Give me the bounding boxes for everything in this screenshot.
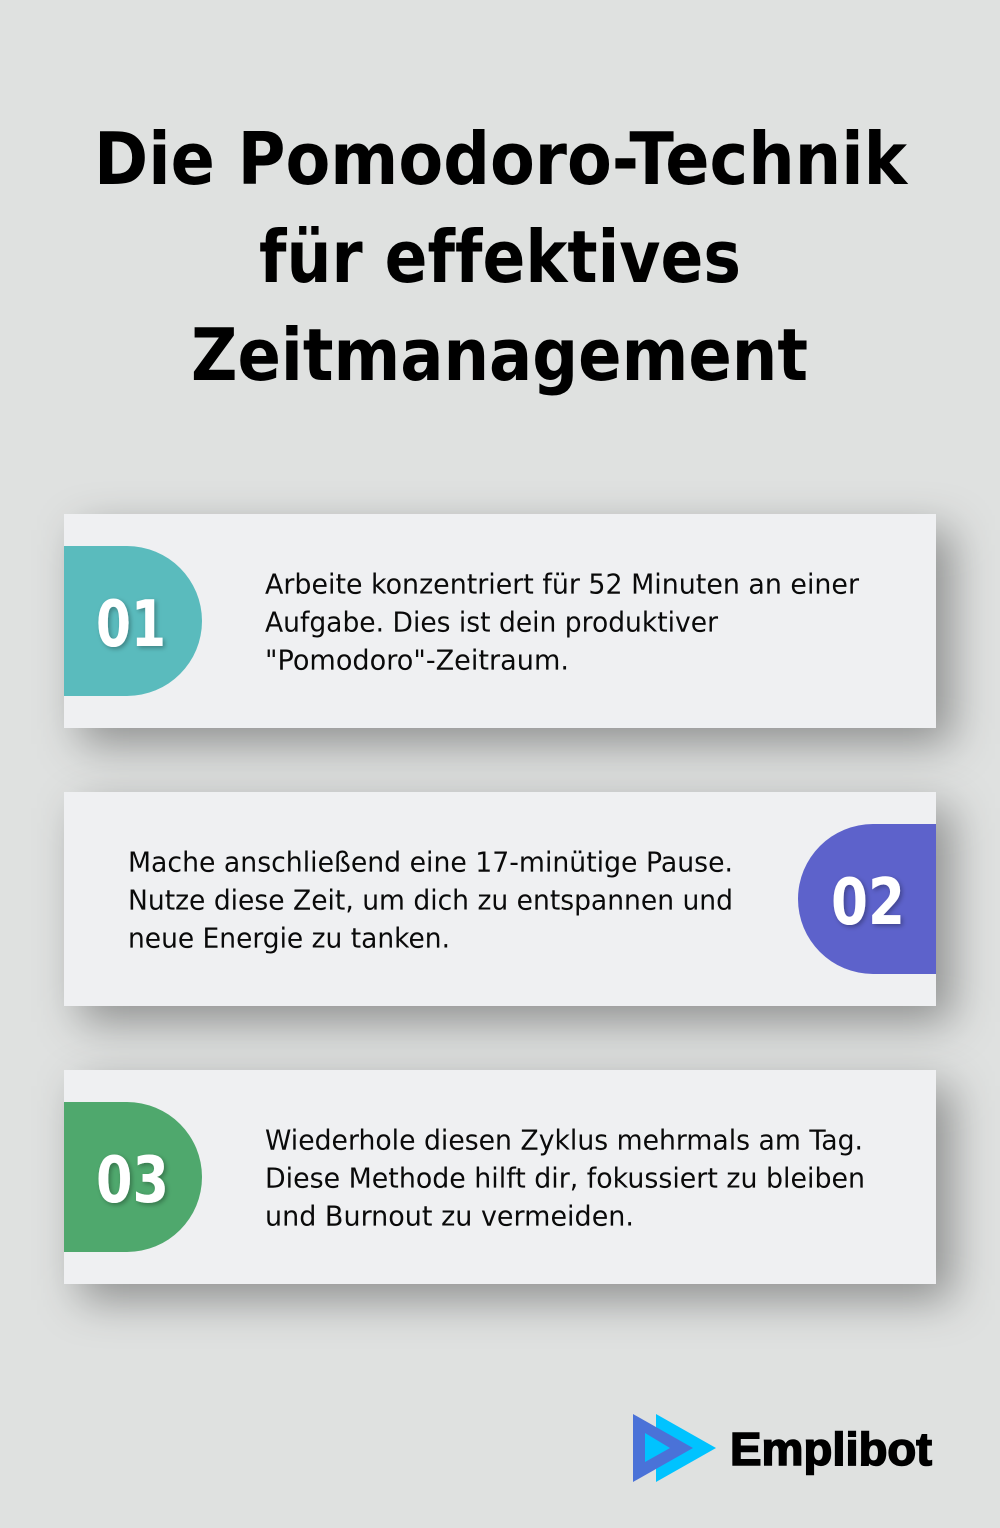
badge: 03: 03 [96, 1143, 169, 1218]
text: step 03 description: und Burnout zu vermeiden. [265, 1200, 634, 1232]
wordmark: Emplibot [730, 1423, 932, 1475]
title: Zeitmanagement [191, 314, 808, 398]
text: step 03 description: Wiederhole diesen Zyklus mehrmals am Tag. [265, 1124, 863, 1156]
text: step 01 description [265, 568, 860, 676]
text: step 01 description: "Pomodoro"-Zeitraum. [265, 644, 569, 676]
badge: 01 [64, 546, 202, 696]
title [94, 118, 909, 398]
text: step 02 description: Mache anschließend eine 17-minütige Pause. [128, 846, 733, 878]
text: step 02 description [128, 846, 733, 954]
text: step 02 description: neue Energie zu tanken. [128, 922, 450, 954]
title: Die Pomodoro-Technik [94, 118, 909, 202]
icon: play triangles [633, 1414, 716, 1482]
panel: step 02 [64, 792, 952, 1022]
logo: Emplibot [633, 1414, 932, 1482]
text: step 01 description: Arbeite konzentriert für 52 Minuten an einer [265, 568, 860, 600]
text: step 01 description: Aufgabe. Dies ist dein produktiver [265, 606, 719, 638]
text: step 02 description: Nutze diese Zeit, um dich zu entspannen und [128, 884, 733, 916]
badge: 01: 01 [96, 587, 166, 662]
panel: step 03 [64, 1070, 952, 1300]
badge: 03 [64, 1102, 202, 1252]
text: step 03 description: Diese Methode hilft dir, fokussiert zu bleiben [265, 1162, 865, 1194]
panel: step 01 [64, 514, 952, 744]
title: für effektives [259, 216, 741, 300]
badge: 02: 02 [831, 865, 905, 940]
badge: 02 [798, 824, 936, 974]
text: step 03 description [265, 1124, 865, 1232]
